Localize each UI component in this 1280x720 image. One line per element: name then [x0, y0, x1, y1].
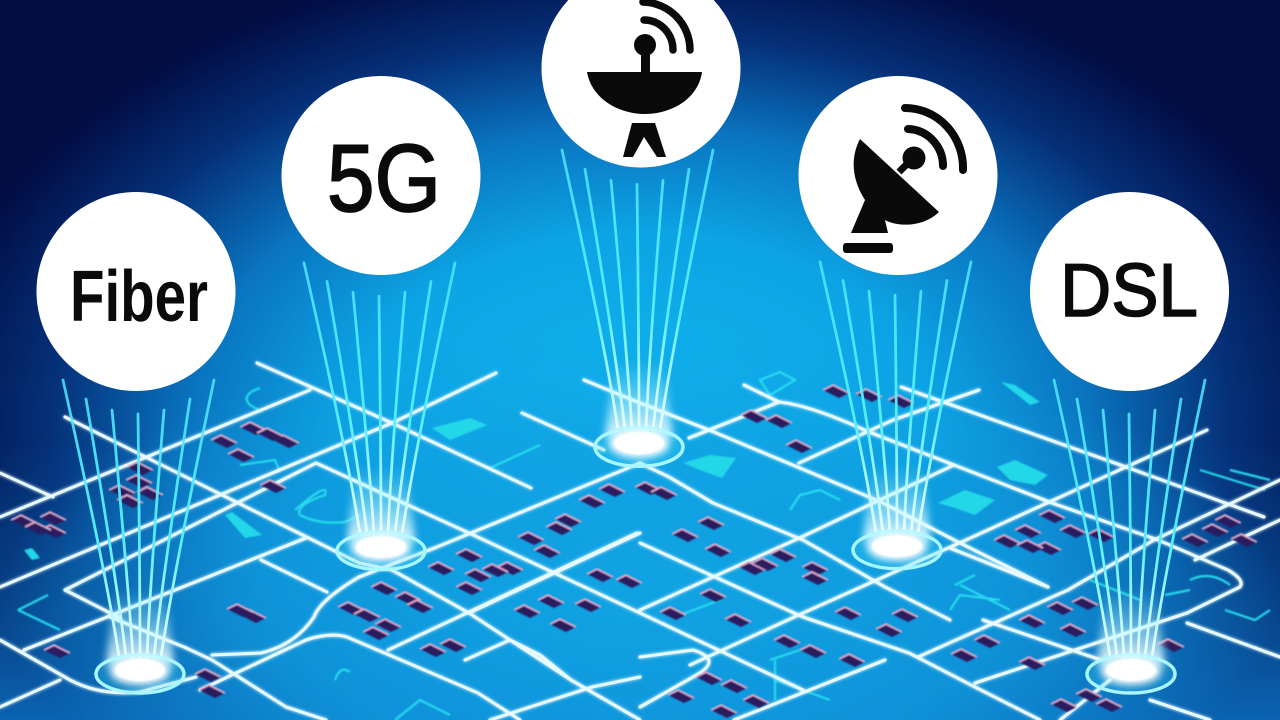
building clusters [11, 385, 1257, 718]
badge: Fiber [36, 192, 236, 391]
city map network [0, 363, 1280, 720]
road grid [0, 363, 1280, 720]
badge: antenna icon [542, 0, 740, 168]
badge: 5G: 5G [327, 125, 441, 232]
beam: Fiber [63, 380, 214, 693]
beam: satellite dish right [820, 262, 971, 569]
cyan land plots [24, 382, 1048, 560]
beam: 5G [304, 263, 455, 570]
beam: DSL [1054, 380, 1205, 693]
beam: satellite antenna centre [562, 150, 713, 466]
badge: DSL: DSL [1060, 248, 1198, 332]
thin cyan paths [18, 372, 1270, 720]
badge: Fiber: Fiber [70, 257, 208, 337]
badge: 5G [282, 76, 480, 275]
badge: DSL [1030, 192, 1229, 391]
badge: satellite dish icon [798, 76, 998, 275]
